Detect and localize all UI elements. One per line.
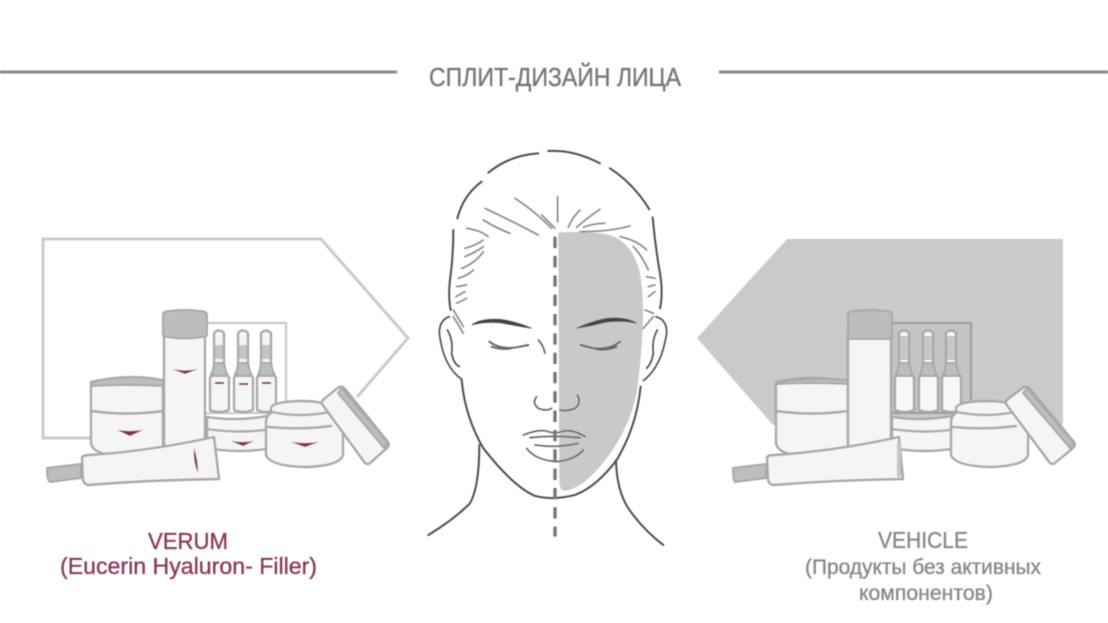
arrow: vehicle solid pointing to face [697,239,1063,425]
jar right [951,401,1028,467]
ears [439,317,667,381]
face illustration [428,151,667,545]
nose [535,340,579,411]
label: verum: VERUM [148,528,228,554]
ampoule 3 [257,330,276,412]
open lid [322,387,389,464]
ampoule stand [207,415,272,451]
ampoule 2 [919,330,938,412]
label: vehicle: VEHICLE [878,527,968,553]
eyebrows [472,318,637,328]
label: vehicle: (Продукты без активных [805,556,1041,579]
ampoule 1 [210,330,229,412]
tall bottle [848,310,892,450]
ampoule 1 [895,330,914,412]
center dashed line [550,237,560,537]
open lid [1006,387,1075,464]
jar left [776,378,848,455]
hair strands [453,197,655,333]
ampoule 3 [942,330,961,412]
ampoule box [205,323,286,413]
products: vehicle [733,310,1075,485]
ampoule stand [892,415,957,451]
eyes [489,342,620,350]
tube [733,437,903,485]
lips [523,431,585,462]
label: verum [60,528,317,579]
jar left [91,377,163,455]
neck [428,445,663,545]
label: vehicle [805,527,1041,605]
label: vehicle: компонентов) [859,582,993,605]
ampoule 2 [234,330,253,412]
jar right [266,401,343,467]
face half shading [558,232,643,491]
tall bottle [163,310,207,450]
arrow: verum outline pointing to face [43,239,408,438]
products: verum [47,310,389,485]
ampoule box [890,323,971,413]
tube [47,437,219,485]
title: СПЛИТ-ДИЗАЙН ЛИЦА [429,62,682,92]
head outline [449,151,662,498]
label: verum: (Eucerin Hyaluron- Filler) [60,553,317,579]
